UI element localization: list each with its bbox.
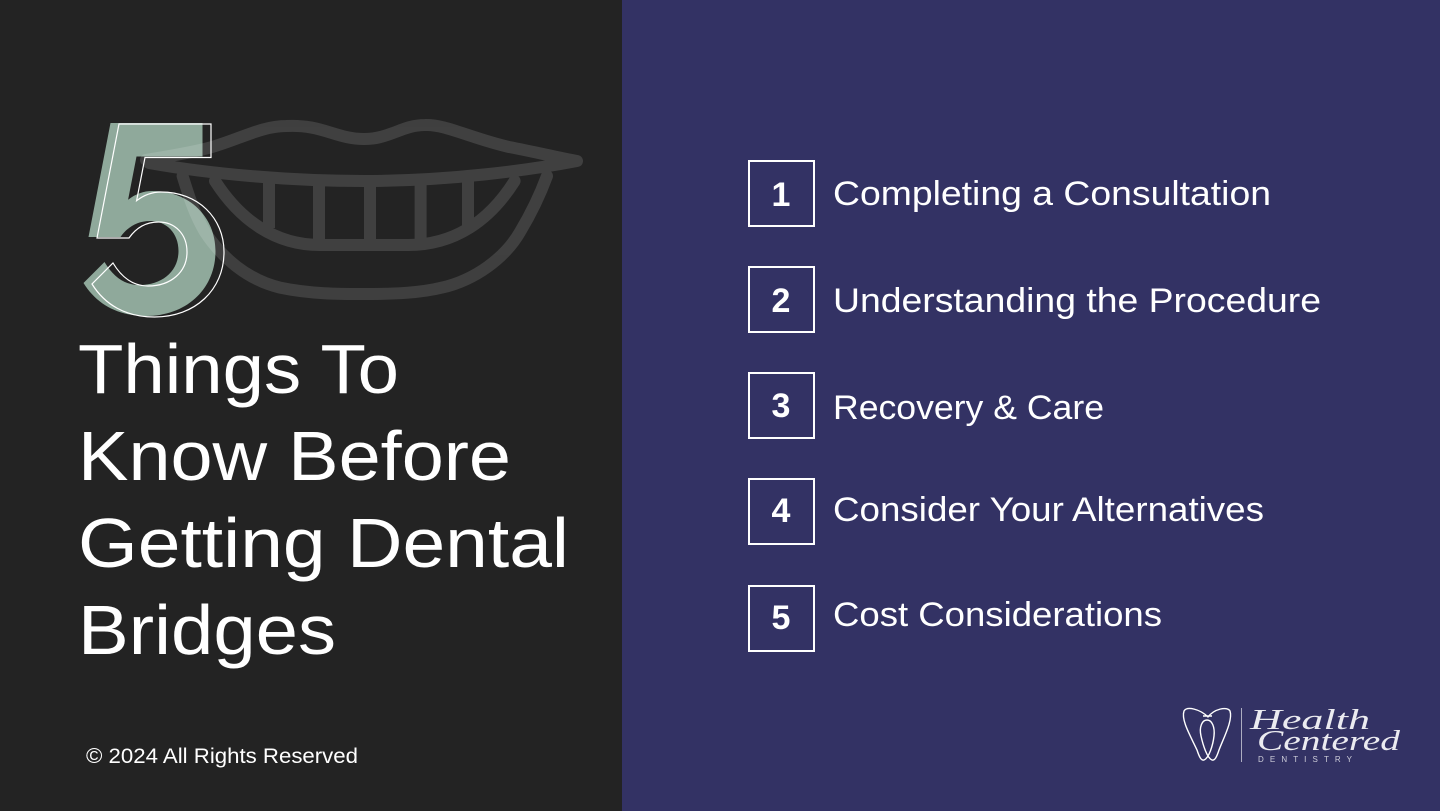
heading bbox=[78, 330, 569, 669]
panel: left dark bbox=[0, 0, 622, 811]
logo script name: Health bbox=[1248, 704, 1370, 736]
heading: Bridges bbox=[78, 591, 336, 669]
list item 1: 1 bbox=[772, 176, 790, 214]
list item 3: Recovery & Care bbox=[833, 389, 1104, 427]
list item 3: 3 bbox=[772, 387, 790, 425]
list item 2: 2 bbox=[772, 282, 790, 320]
panel: right navy bbox=[622, 0, 1440, 811]
icon: smile lips bbox=[146, 125, 577, 294]
list item 1 bbox=[749, 161, 1271, 226]
heading: Getting Dental bbox=[78, 504, 569, 582]
list item 5 bbox=[749, 586, 1162, 651]
list item 2 bbox=[749, 267, 1321, 332]
logo script name: Centered bbox=[1257, 725, 1401, 757]
logo tagline: DENTISTRY bbox=[1258, 755, 1353, 764]
logo script name bbox=[1248, 704, 1401, 757]
list item 1: Completing a Consultation bbox=[833, 175, 1271, 213]
five: white outline bbox=[92, 124, 224, 317]
list item 2: Understanding the Procedure bbox=[833, 282, 1321, 320]
copyright: © 2024 All Rights Reserved bbox=[86, 745, 358, 768]
list item 5: Cost Considerations bbox=[833, 596, 1162, 634]
heading: Things To bbox=[78, 330, 399, 408]
list item 4: 4 bbox=[772, 492, 791, 530]
logo divider bbox=[1241, 708, 1242, 762]
list item 5: 5 bbox=[772, 599, 790, 637]
heading: Know Before bbox=[78, 417, 511, 495]
icon: tooth ribbon bbox=[1183, 709, 1231, 760]
five: mint fill bbox=[84, 123, 216, 316]
logo: Health Centered Dentistry bbox=[1183, 704, 1401, 764]
list item 4: Consider Your Alternatives bbox=[833, 491, 1264, 529]
list item 3 bbox=[749, 373, 1104, 438]
big number 5 bbox=[84, 123, 224, 317]
list item 4 bbox=[749, 479, 1264, 544]
